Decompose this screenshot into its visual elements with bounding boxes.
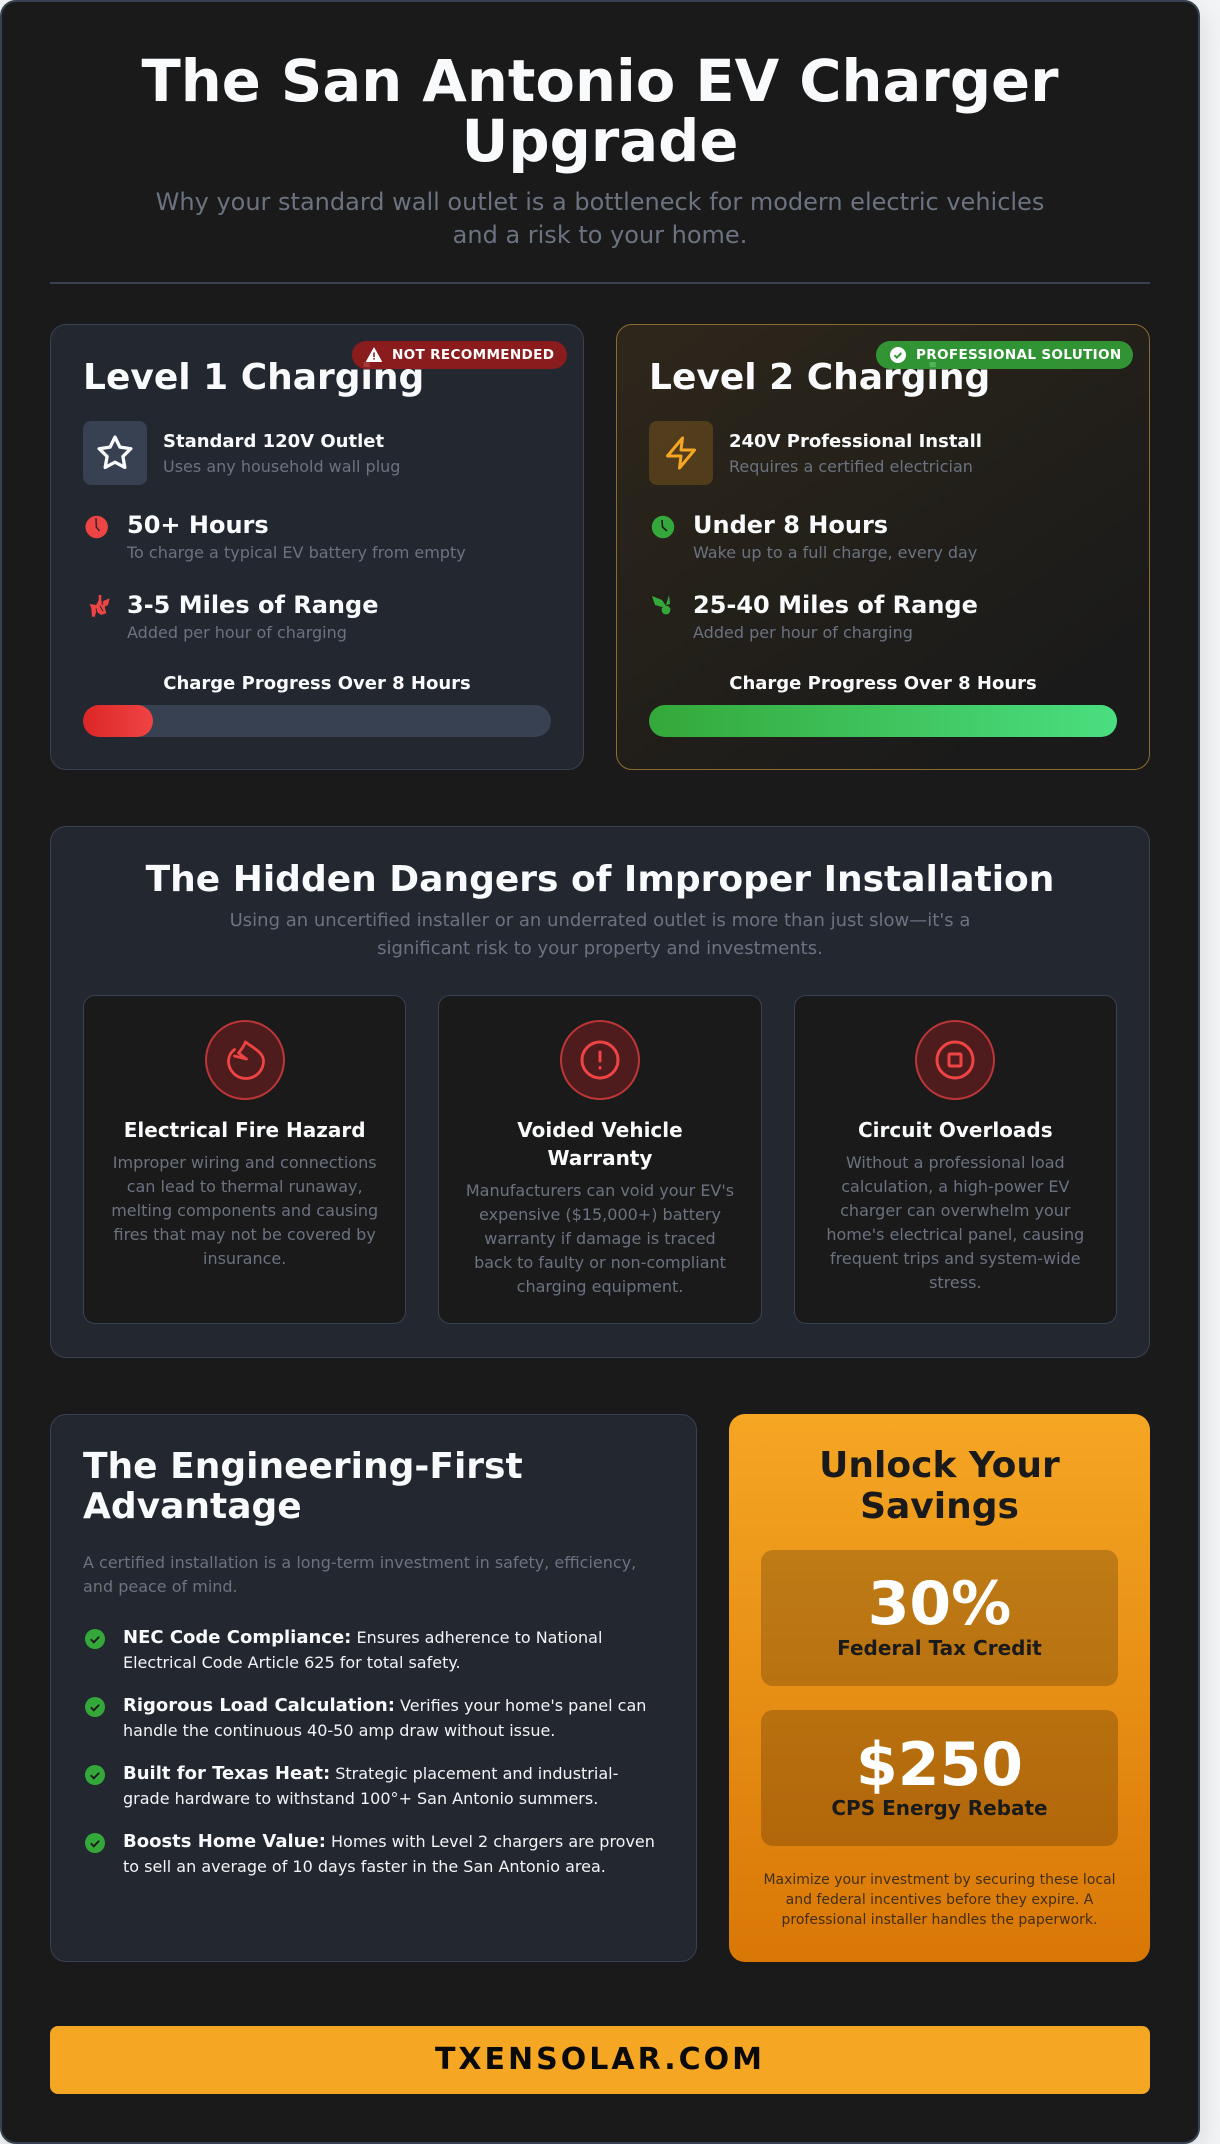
icon: red range [90, 595, 110, 617]
list item: heat: Built for Texas Heat: Strategic placement and industrial- [123, 1763, 618, 1784]
savings note: professional installer handles the paperwork. [782, 1912, 1097, 1928]
stat value 30%: 30% [868, 1569, 1011, 1639]
panel: engineering advantage [50, 1414, 697, 1962]
icon: check [85, 1697, 105, 1717]
engineering heading: The Engineering-First [83, 1446, 523, 1487]
engineering heading [83, 1446, 523, 1527]
icon: stop circle [915, 1020, 995, 1100]
metric: range [693, 591, 978, 642]
stat label: CPS Energy Rebate [831, 1796, 1048, 1820]
level 2 type text: Requires a certified electrician [729, 457, 973, 476]
danger card: warranty [438, 995, 762, 1324]
warranty title: Voided Vehicle [517, 1118, 683, 1142]
dangers subtitle: significant risk to your property and investments. [377, 938, 823, 959]
icon: flame [205, 1020, 285, 1100]
level 1 type text: Uses any household wall plug [163, 457, 400, 476]
warranty title [517, 1118, 683, 1170]
overloads text: charger can overwhelm your [840, 1201, 1070, 1220]
metric: charge time: To charge a typical EV battery from empty [127, 543, 466, 562]
warranty text: warranty if damage is traced [484, 1229, 716, 1248]
engineering intro [83, 1553, 636, 1596]
overloads text [826, 1153, 1084, 1292]
metric: charge time: Under 8 Hours [693, 511, 888, 539]
level 2 type text [729, 431, 982, 476]
icon: green clock [652, 516, 674, 538]
metric: range: 3-5 Miles of Range [127, 591, 378, 619]
fire text [111, 1153, 378, 1268]
overloads text: home's electrical panel, causing [826, 1225, 1084, 1244]
subtitle: and a risk to your home. [453, 221, 747, 249]
warranty text: back to faulty or non-compliant [474, 1253, 726, 1272]
fire text: Improper wiring and connections [113, 1153, 377, 1172]
level 1 type text [163, 431, 400, 476]
icon box: lightning bolt [649, 421, 713, 485]
panel: savings [729, 1414, 1150, 1962]
list item: NEC: NEC Code Compliance: Ensures adherence to National [123, 1627, 602, 1648]
fire text: fires that may not be covered by [114, 1225, 376, 1244]
stat: tax credit [761, 1550, 1118, 1686]
subtitle [156, 188, 1044, 249]
overloads text: stress. [929, 1273, 982, 1292]
progress bar: level 1 [83, 705, 551, 737]
list item: load [123, 1695, 646, 1740]
panel: level 1 charging [50, 324, 584, 770]
danger card: fire [83, 995, 406, 1324]
savings heading [819, 1445, 1060, 1527]
list item: NEC [123, 1627, 602, 1672]
level 2 type text: 240V Professional Install [729, 431, 982, 452]
panel: level 2 charging [616, 324, 1150, 770]
savings note: Maximize your investment by securing these local [763, 1872, 1116, 1888]
fire text: melting components and causing [111, 1201, 378, 1220]
warranty text: Manufacturers can void your EV's [466, 1181, 734, 1200]
progress label: Charge Progress Over 8 Hours [729, 673, 1037, 694]
metric: range: 25-40 Miles of Range [693, 591, 978, 619]
warranty text: expensive ($15,000+) battery [479, 1205, 721, 1224]
metric: charge time [127, 511, 466, 562]
metric: range: Added per hour of charging [127, 623, 347, 642]
stat value $250: $250 [856, 1730, 1023, 1800]
savings heading: Unlock Your [819, 1445, 1060, 1486]
list item: value [123, 1831, 655, 1876]
title: Upgrade [462, 108, 738, 175]
list item: NEC: Electrical Code Article 625 for total safety. [123, 1653, 461, 1672]
list item: value: Boosts Home Value: Homes with Level 2 chargers are proven [123, 1831, 655, 1852]
metric: charge time: Wake up to a full charge, every day [693, 543, 977, 562]
fire text: insurance. [203, 1249, 286, 1268]
footer banner: TXENSOLAR.COM [435, 2042, 765, 2077]
footer banner [50, 2026, 1150, 2094]
stat label: Federal Tax Credit [837, 1636, 1042, 1660]
icon: check [85, 1765, 105, 1785]
metric: charge time [693, 511, 977, 562]
icon: check [85, 1629, 105, 1649]
fire text: can lead to thermal runaway, [127, 1177, 363, 1196]
fire title: Electrical Fire Hazard [124, 1118, 366, 1142]
list item: heat [123, 1763, 618, 1808]
progress label: Charge Progress Over 8 Hours [163, 673, 471, 694]
icon: check circle [890, 347, 906, 363]
dangers subtitle [230, 910, 970, 959]
engineering heading: Advantage [83, 1486, 302, 1527]
progress bar: level 2 [649, 705, 1117, 737]
overloads title: Circuit Overloads [858, 1118, 1053, 1142]
list item: load: Rigorous Load Calculation: Verifies your home's panel can [123, 1695, 646, 1716]
level 1 heading: Level 1 Charging [83, 357, 424, 398]
overloads text: calculation, a high-power EV [841, 1177, 1069, 1196]
badge: professional solution [876, 341, 1133, 369]
badge: not recommended [352, 341, 567, 369]
overloads text: Without a professional load [846, 1153, 1065, 1172]
savings note [763, 1872, 1116, 1928]
icon: red clock [86, 516, 108, 538]
dangers subtitle: Using an uncertified installer or an underrated outlet is more than just slow—it's a [230, 910, 970, 931]
dangers heading: The Hidden Dangers of Improper Installation [146, 859, 1054, 900]
warranty title: Warranty [548, 1146, 652, 1170]
badge: not recommended: NOT RECOMMENDED [392, 347, 554, 363]
stat: rebate [761, 1710, 1118, 1846]
icon: warning triangle [366, 348, 382, 362]
overloads text: frequent trips and system-wide [830, 1249, 1081, 1268]
savings note: and federal incentives before they expire. A [786, 1892, 1093, 1908]
title: The San Antonio EV Charger [141, 48, 1059, 115]
danger card: overloads [794, 995, 1117, 1324]
level 1 type text: Standard 120V Outlet [163, 431, 384, 452]
icon: alert circle [560, 1020, 640, 1100]
savings heading: Savings [860, 1486, 1019, 1527]
icon: check [85, 1833, 105, 1853]
warranty text [466, 1181, 734, 1296]
panel: hidden dangers [50, 826, 1150, 1358]
badge: professional solution: PROFESSIONAL SOLUTION [916, 347, 1122, 363]
engineering intro: and peace of mind. [83, 1577, 238, 1596]
icon box: outlet star [83, 421, 147, 485]
level 2 heading: Level 2 Charging [649, 357, 990, 398]
engineering intro: A certified installation is a long-term investment in safety, efficiency, [83, 1553, 636, 1572]
icon: green leaf [652, 595, 670, 614]
metric: range [127, 591, 378, 642]
list item: load: handle the continuous 40-50 amp draw without issue. [123, 1721, 555, 1740]
subtitle: Why your standard wall outlet is a bottleneck for modern electric vehicles [156, 188, 1044, 216]
metric: charge time: 50+ Hours [127, 511, 269, 539]
list item: value: to sell an average of 10 days faster in the San Antonio area. [123, 1857, 606, 1876]
list item: heat: grade hardware to withstand 100°+ San Antonio summers. [123, 1789, 598, 1808]
title [141, 48, 1059, 175]
warranty text: charging equipment. [517, 1277, 683, 1296]
metric: range: Added per hour of charging [693, 623, 913, 642]
